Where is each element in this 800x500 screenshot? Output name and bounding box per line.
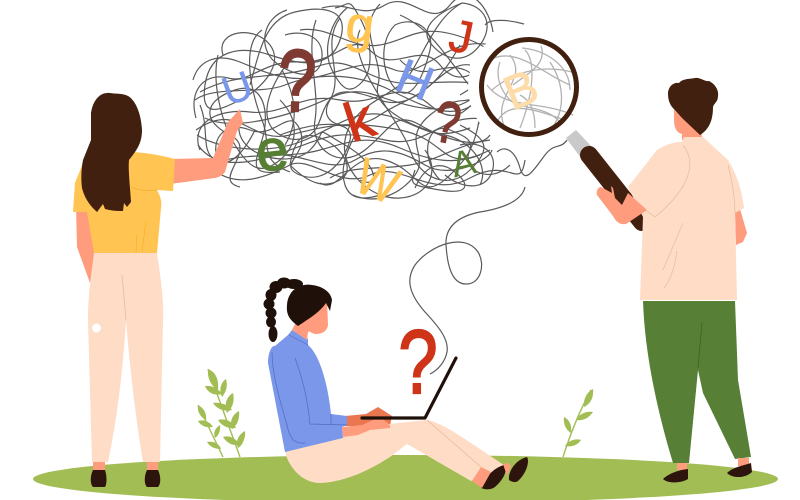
pants crease: [698, 322, 702, 368]
scribble tangle: [193, 0, 567, 374]
magnifier neck: [566, 130, 592, 158]
neck and head: [674, 100, 702, 140]
far arm: [735, 209, 747, 245]
letter U: U: [216, 63, 259, 114]
braid: [264, 278, 303, 342]
shirt: [73, 152, 175, 253]
raised arm: [170, 109, 243, 184]
plant: right: [563, 389, 593, 457]
letter A: A: [447, 140, 479, 185]
person: seated woman: [264, 278, 528, 489]
letter k: k: [337, 88, 382, 154]
question mark: brown large: ?: [276, 31, 318, 131]
hair: [287, 285, 332, 326]
ankles: [677, 458, 749, 470]
front hand: [342, 417, 390, 437]
sweater folds: [272, 335, 347, 443]
letter J: J: [445, 9, 478, 64]
hair: [668, 78, 718, 135]
pants: [88, 253, 163, 462]
letter H: H: [389, 50, 441, 112]
pants: [285, 420, 507, 483]
ankles: [93, 462, 158, 471]
sweater: [268, 330, 347, 452]
back hand: [345, 407, 392, 426]
magnifier halo: [468, 26, 590, 148]
shoes: [663, 463, 752, 482]
shirt folds: [131, 187, 157, 252]
letter e: e: [253, 117, 291, 185]
knee dot: [92, 324, 101, 332]
left arm: [76, 205, 95, 283]
question mark: red: ?: [398, 313, 438, 413]
ground: [33, 455, 778, 500]
letter B in lens: B: [496, 60, 546, 121]
shirt folds: [643, 145, 735, 288]
person: left woman: [73, 93, 243, 487]
ankles: [472, 463, 511, 488]
tangle seen through lens: [487, 46, 573, 128]
pants: [643, 301, 751, 463]
person: right man: [597, 78, 752, 482]
question mark: brown small: ?: [429, 89, 465, 157]
shoes: [481, 457, 528, 489]
magnifier ring: [482, 40, 576, 134]
laptop: [362, 358, 456, 418]
arm holding handle: [597, 186, 647, 224]
pants crease: [427, 420, 481, 467]
shoes: [91, 470, 160, 487]
shirt: [628, 137, 744, 300]
pants crease: [122, 275, 126, 320]
magnifier handle: [589, 155, 642, 222]
neck and face: [292, 300, 328, 340]
plant: left: [198, 369, 245, 457]
hair: [81, 93, 142, 212]
letter W: W: [348, 148, 407, 215]
